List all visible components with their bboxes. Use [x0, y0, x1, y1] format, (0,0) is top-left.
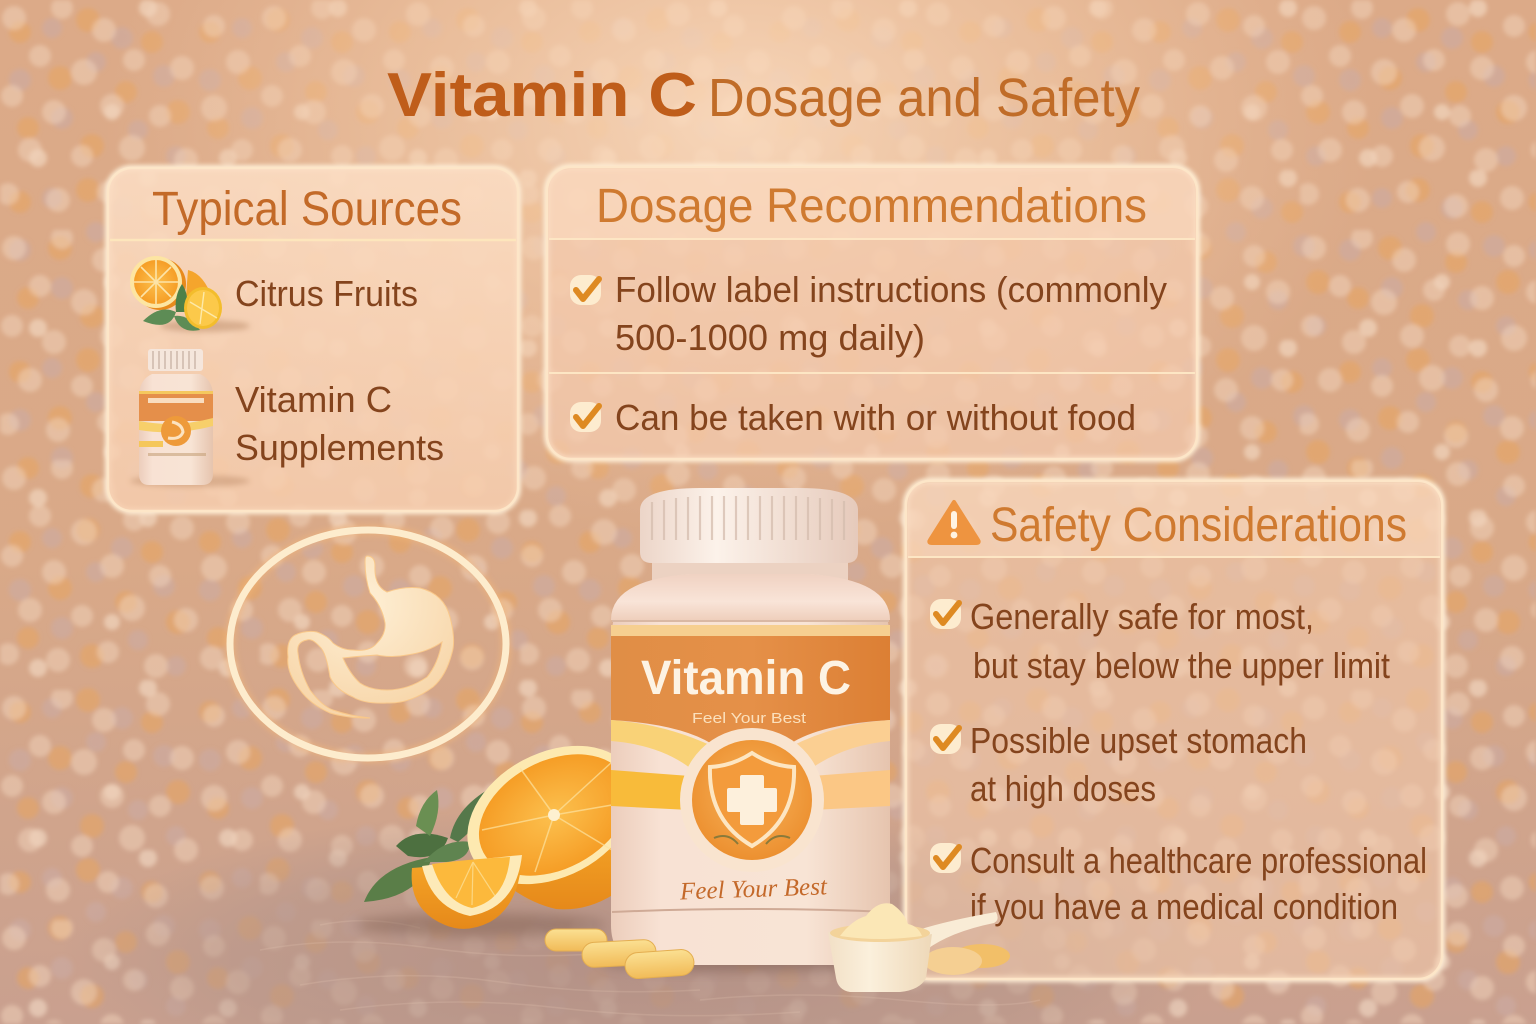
check icon 1 [570, 275, 601, 305]
scoop with powder [828, 903, 998, 992]
icon: stomach in glowing ring [230, 530, 506, 758]
heading: typical sources: Typical Sources [152, 183, 462, 236]
heading: safety considerations: Safety Considerations [990, 499, 1407, 552]
leaves [364, 785, 496, 902]
title: Dosage and Safety [708, 68, 1140, 128]
bottle slogan: Feel Your Best [679, 873, 828, 905]
icon: citrus fruits [130, 256, 250, 332]
bottle brand text: Feel Your Best [692, 710, 807, 727]
shield emblem [680, 728, 824, 872]
label: vitamin c supplements [235, 379, 444, 468]
safety text 3: Consult a healthcare professional [970, 840, 1427, 881]
bottle brand text: Vitamin C [641, 652, 851, 705]
check icon 3 [930, 843, 961, 873]
cap [640, 488, 858, 581]
safety text 3 [970, 840, 1427, 927]
label: vitamin c supplements: Vitamin C [235, 379, 392, 420]
panel: dosage recommendations [547, 167, 1197, 459]
safety text 2: at high doses [970, 768, 1156, 809]
safety text 1 [970, 596, 1390, 686]
safety text 3: if you have a medical condition [970, 886, 1398, 927]
safety text 2: Possible upset stomach [970, 720, 1307, 761]
heading: dosage recommendations: Dosage Recommendations [596, 180, 1147, 233]
orange half [467, 746, 611, 910]
dosage text 1: 500-1000 mg daily) [615, 317, 925, 358]
main vitamin c bottle [600, 488, 900, 971]
softgel capsules [545, 929, 1010, 979]
icon: supplement bottle [130, 349, 250, 487]
check icon 2 [570, 402, 601, 432]
title: Vitamin C [387, 61, 697, 130]
label: citrus fruits: Citrus Fruits [235, 273, 418, 314]
orange label band [611, 625, 890, 810]
check icon 1 [930, 599, 961, 629]
safety text 1: but stay below the upper limit [973, 645, 1390, 686]
panel: safety considerations [906, 481, 1442, 979]
title [387, 61, 1140, 130]
label: vitamin c supplements: Supplements [235, 427, 444, 468]
panel: typical sources [108, 168, 518, 511]
scene: oranges and leaves [356, 746, 611, 940]
safety text 2 [970, 720, 1307, 809]
orange wedge [412, 855, 522, 929]
check icon 2 [930, 724, 961, 754]
bottle body [611, 574, 890, 965]
dosage text 1: Follow label instructions (commonly [615, 269, 1167, 310]
icon: warning triangle [929, 502, 979, 543]
dosage text 2: Can be taken with or without food [615, 397, 1136, 438]
safety text 1: Generally safe for most, [970, 596, 1314, 637]
bottle brand text [641, 652, 851, 727]
dosage text 1 [615, 269, 1167, 358]
